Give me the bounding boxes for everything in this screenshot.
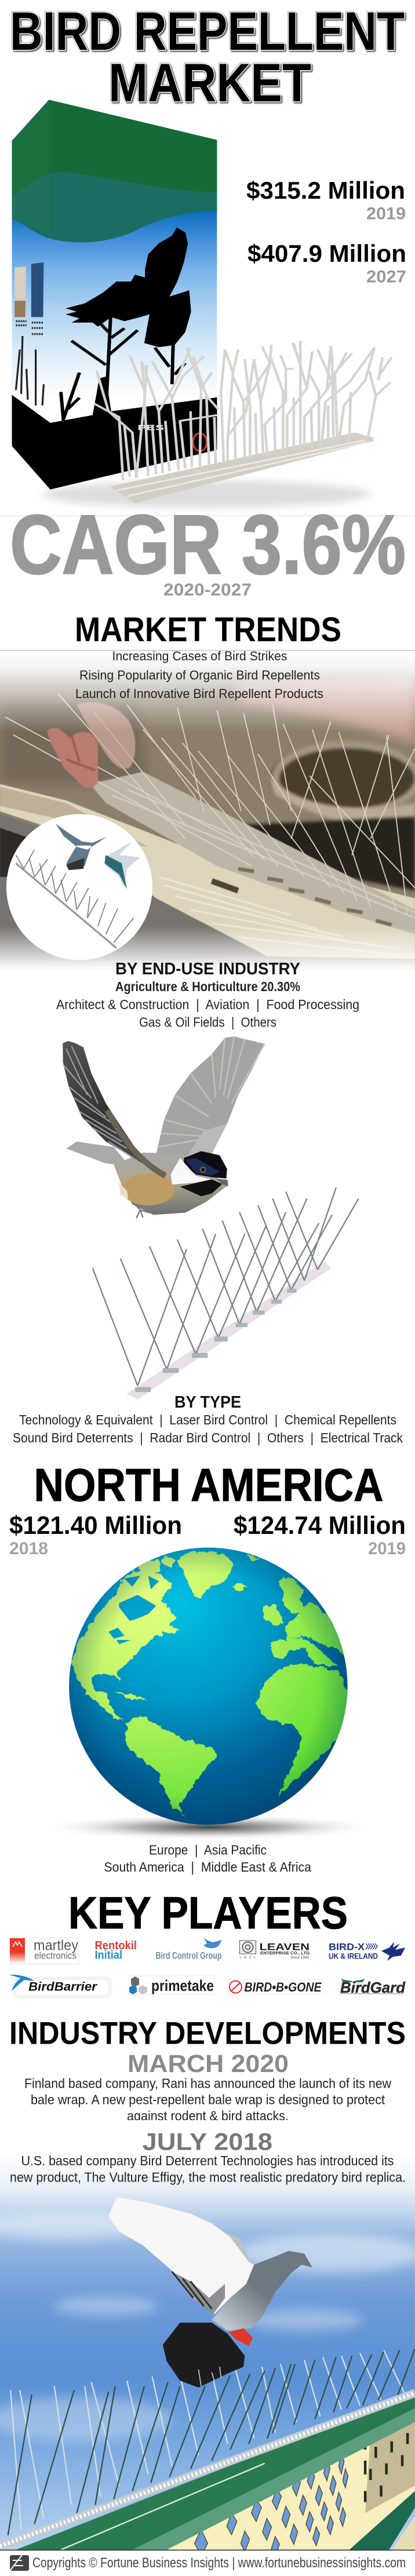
photo: hand installing bird spikes bbox=[0, 650, 415, 969]
market trends list bbox=[75, 649, 323, 701]
box label: PES bbox=[137, 424, 164, 432]
north america value 2019: $124.74 Million bbox=[234, 1511, 406, 1540]
north america value 2019: 2019 bbox=[368, 1539, 406, 1558]
globe shadow bbox=[39, 1814, 378, 1840]
globe rim shade bbox=[69, 1548, 348, 1825]
footer rule bbox=[0, 2550, 415, 2551]
green rail bbox=[16, 2393, 415, 2550]
north america value 2019 bbox=[234, 1511, 406, 1558]
logo: bird-x uk and ireland: BIRD-X bbox=[329, 1942, 365, 1952]
other regions list: South America | Middle East & Africa bbox=[104, 1859, 311, 1875]
market size 2019: $315.2 Million bbox=[246, 177, 405, 204]
market trends list: Launch of Innovative Bird Repellent Products bbox=[75, 686, 323, 701]
development text: march 2020: against rodent & bird attacks. bbox=[127, 2109, 289, 2124]
market trends list: Increasing Cases of Bird Strikes bbox=[112, 649, 287, 663]
silver spike base bbox=[0, 2393, 415, 2546]
plastic spike base bbox=[90, 772, 415, 934]
development date: march 2020: MARCH 2020 bbox=[128, 2050, 289, 2078]
body bbox=[114, 1153, 228, 1215]
logo: primetake bbox=[129, 1976, 214, 1994]
logo: bird-x uk and ireland bbox=[329, 1942, 405, 1961]
title: MARKET bbox=[108, 52, 311, 113]
inset circle with birds and spikes bbox=[6, 814, 152, 960]
logo: leaven enterprise: LEAVEN bbox=[260, 1942, 310, 1952]
inland seas bbox=[108, 1576, 159, 1644]
north america value 2018: 2018 bbox=[9, 1539, 48, 1558]
development text: july 2018: U.S. based company Bird Deterrent Technologies has introduced its bbox=[21, 2153, 394, 2168]
by type list bbox=[13, 1412, 403, 1445]
north america value 2018: $121.40 Million bbox=[9, 1511, 182, 1540]
logo: leaven enterprise: L E C L bbox=[240, 1956, 256, 1960]
development text: march 2020: bale wrap. A new pest-repellent bale wrap is designed to protect bbox=[31, 2092, 385, 2107]
tail bbox=[66, 1142, 130, 1166]
logo: martley electronics: electronics bbox=[34, 1950, 77, 1961]
heading: north america: NORTH AMERICA bbox=[34, 1459, 384, 1511]
market trends list: Rising Popularity of Organic Bird Repellents bbox=[79, 668, 320, 682]
pigeon bbox=[108, 2197, 312, 2388]
logo: rentokil initial: Initial bbox=[95, 1949, 122, 1961]
logo: rentokil initial: Rentokil bbox=[95, 1939, 137, 1952]
other regions list bbox=[104, 1842, 311, 1875]
logo: martley electronics bbox=[10, 1937, 79, 1964]
development date: july 2018: JULY 2018 bbox=[143, 2128, 272, 2155]
illustration: product box upper part bbox=[12, 100, 217, 388]
thin metal spikes bbox=[5, 694, 415, 915]
heading: by end-use industry: BY END-USE INDUSTRY bbox=[115, 960, 300, 978]
development text: march 2020 bbox=[24, 2076, 391, 2124]
title bbox=[10, 1, 405, 113]
other regions list: Europe | Asia Pacific bbox=[149, 1842, 267, 1857]
development text: july 2018 bbox=[10, 2153, 406, 2185]
north america value 2018 bbox=[9, 1511, 182, 1558]
spike strip base bbox=[110, 433, 374, 503]
logo: bird barrier bbox=[9, 1975, 110, 1997]
end-use industry list: Gas & Oil Fields | Others bbox=[139, 1015, 276, 1030]
logo: bird control group bbox=[155, 1937, 222, 1961]
logo: rentokil initial bbox=[95, 1939, 137, 1961]
flying bird silhouette bbox=[65, 228, 191, 347]
logo: primetake: primetake bbox=[151, 1977, 214, 1994]
illustration: globe bbox=[69, 1548, 348, 1838]
head bbox=[184, 1151, 227, 1178]
heading: key players: KEY PLAYERS bbox=[68, 1887, 348, 1938]
market size 2027: 2027 bbox=[366, 268, 406, 286]
heading: market trends: MARKET TRENDS bbox=[75, 611, 341, 649]
end-use industry list: Agriculture & Horticulture 20.30% bbox=[115, 979, 300, 994]
logo: leaven enterprise: ENTERPRISE CO., LTD. bbox=[260, 1952, 311, 1956]
box body bbox=[12, 100, 217, 388]
near wing bbox=[63, 1041, 167, 1176]
background nest and ledge bbox=[0, 743, 415, 964]
market size 2027: $407.9 Million bbox=[247, 240, 406, 267]
logo: bird barrier: BirdBarrier bbox=[28, 1980, 98, 1994]
development text: march 2020: Finland based company, Rani has announced the launch of its new bbox=[24, 2076, 391, 2091]
far wing bbox=[156, 1036, 265, 1157]
fades bbox=[0, 650, 415, 732]
CAGR period: 2020-2027 bbox=[163, 580, 252, 600]
feet bbox=[134, 1203, 150, 1218]
tree silhouettes bbox=[61, 305, 185, 421]
logo: leaven enterprise bbox=[240, 1941, 311, 1960]
spikes bbox=[10, 2350, 405, 2530]
logo: bird b gone: BIRD•B•GONE bbox=[245, 1980, 322, 1994]
logo: bird control group: Bird Control Group bbox=[155, 1950, 221, 1961]
logo: bird gard: BirdGard bbox=[340, 1979, 406, 1996]
logo: leaven enterprise: Since 1984 bbox=[290, 1956, 310, 1960]
logo: martley electronics: martley bbox=[34, 1937, 78, 1953]
footer brand icon bbox=[10, 2555, 29, 2571]
globe sphere bbox=[69, 1548, 348, 1825]
end-use industry list: Architect & Construction | Aviation | Food Processing bbox=[56, 997, 359, 1012]
continents bbox=[71, 1551, 350, 1821]
heading: by type: BY TYPE bbox=[174, 1393, 241, 1412]
market size 2019 bbox=[246, 177, 406, 224]
illustration: metal bird spikes bbox=[93, 1187, 359, 1400]
shadow under product bbox=[42, 481, 370, 508]
end-use industry list bbox=[56, 979, 359, 1030]
photo: pigeon over spikes on fence bbox=[0, 2120, 415, 2557]
illustration: chickadee in flight bbox=[63, 1036, 265, 1218]
lattice fence bbox=[167, 2406, 415, 2550]
spikes bbox=[94, 341, 392, 480]
black ground bbox=[12, 377, 217, 489]
illustration: box base, tree silhouettes and plastic spike strip bbox=[12, 305, 392, 508]
market size 2019: 2019 bbox=[366, 204, 406, 224]
sky bbox=[0, 2120, 415, 2550]
logo: bird-x uk and ireland: UK & IRELAND bbox=[329, 1951, 378, 1960]
hand bbox=[48, 702, 135, 788]
market size 2027 bbox=[247, 240, 406, 286]
